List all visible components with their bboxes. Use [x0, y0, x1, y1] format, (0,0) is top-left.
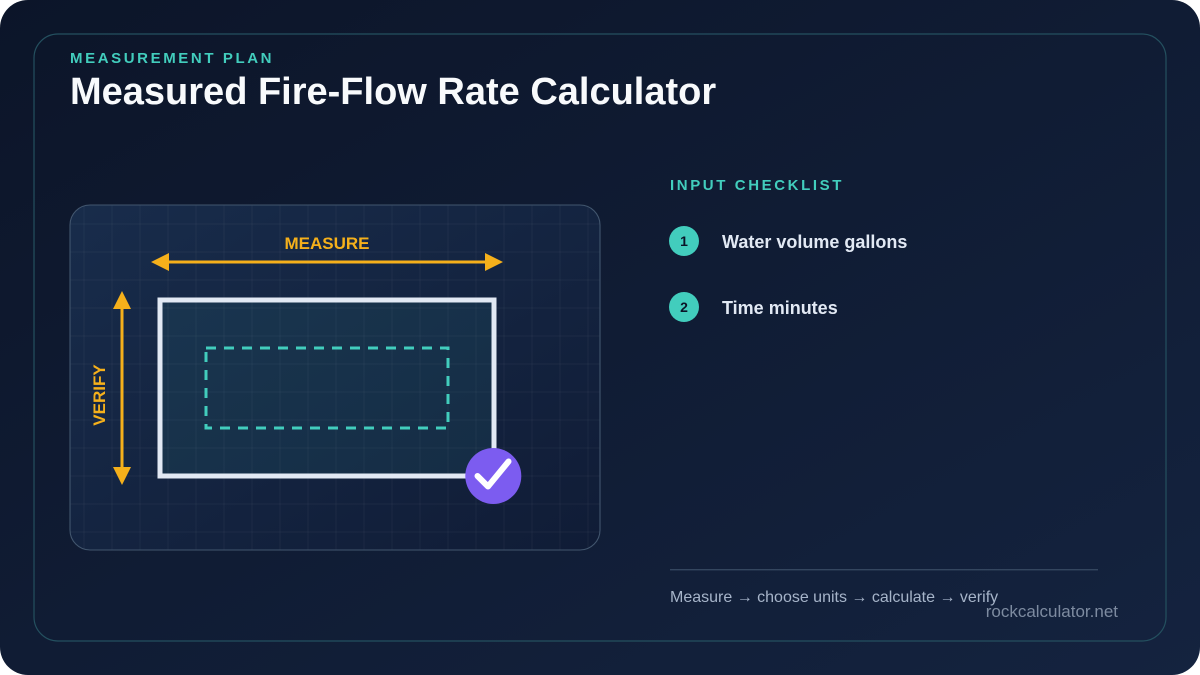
- checklist item 2: 2: [680, 299, 688, 315]
- title: Measured Fire-Flow Rate Calculator: [70, 71, 716, 113]
- checklist item 2: Time minutes: [722, 298, 838, 318]
- source credit: rockcalculator.net: [986, 602, 1118, 621]
- eyebrow label: MEASUREMENT PLAN: [70, 50, 274, 67]
- heading: input checklist: INPUT CHECKLIST: [670, 177, 844, 194]
- checklist item 2: [669, 292, 838, 322]
- checklist item 1: [669, 226, 907, 256]
- icon: check badge: [465, 448, 521, 504]
- label: measure: MEASURE: [284, 234, 370, 253]
- checklist item 1: 1: [680, 233, 688, 249]
- panel: measurement diagram: [70, 205, 600, 550]
- checklist item 1: Water volume gallons: [722, 232, 907, 252]
- label: verify: VERIFY: [90, 364, 109, 426]
- vertical arrow: verify: [113, 291, 131, 485]
- process footer text: Measure → choose units → calculate → verify: [670, 589, 998, 606]
- dashed inner rectangle: [206, 348, 448, 428]
- divider: [670, 569, 1098, 570]
- horizontal arrow: measure: [151, 253, 503, 271]
- measured rectangle: [160, 300, 494, 476]
- panel background: [70, 205, 600, 550]
